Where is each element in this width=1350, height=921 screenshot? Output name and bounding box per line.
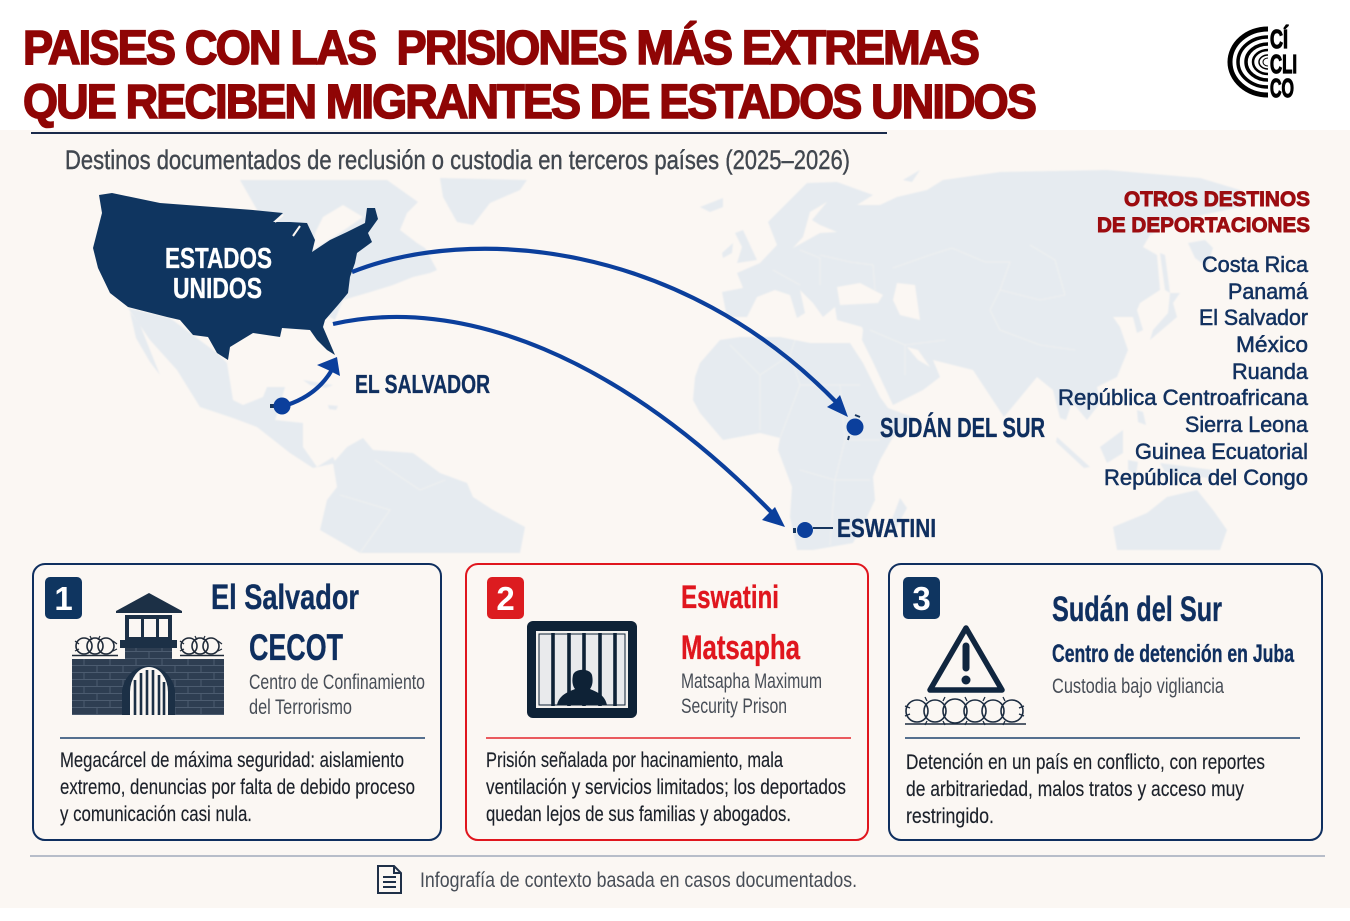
other destinations list: República del Congo	[1104, 465, 1308, 490]
marker: Eswatini	[793, 522, 833, 538]
description: Detención en un país en conflicto, con reportes	[906, 751, 1265, 774]
badge 2	[487, 577, 524, 619]
arrow: to El Salvador	[287, 357, 340, 405]
subheading: Matsapha: Matsapha	[681, 629, 801, 667]
marker: El Salvador	[270, 398, 290, 414]
facility name: Security Prison	[681, 695, 787, 718]
other destinations list: Ruanda	[1232, 359, 1309, 384]
country borders	[340, 245, 1075, 553]
icon: prisoner behind bars	[527, 621, 637, 718]
other destinations heading	[1097, 188, 1310, 237]
label: Sudán del Sur: SUDÁN DEL SUR	[880, 412, 1045, 443]
icon: prison fortress	[72, 593, 224, 715]
other destinations list: República Centroafricana	[1058, 385, 1309, 410]
other destinations list	[1058, 252, 1309, 490]
description: Megacárcel de máxima seguridad: aislamiento	[60, 749, 404, 772]
description: quedan lejos de sus familias y abogados.	[486, 803, 791, 826]
badge 3: 3	[912, 580, 931, 617]
icon: document	[378, 866, 401, 893]
subtitle: Destinos documentados de reclusión o custodia en terceros países (2025–2026)	[65, 145, 850, 175]
map: Estados Unidos highlighted	[93, 193, 378, 360]
icon: warning and barbed wire	[905, 628, 1026, 725]
description	[486, 749, 846, 826]
heading: El Salvador: El Salvador	[211, 578, 359, 617]
facility name: Centro de Confinamiento	[249, 671, 425, 694]
description: y comunicación casi nula.	[60, 803, 252, 826]
title rule	[31, 132, 887, 134]
badge 3	[903, 577, 940, 619]
logo: Cíclico: CO	[1270, 73, 1294, 103]
panel: Sudán del Sur	[889, 564, 1322, 840]
logo: Cíclico	[1230, 24, 1297, 103]
other destinations list: Costa Rica	[1202, 252, 1309, 277]
description: de arbitrariedad, malos tratos y acceso muy	[906, 778, 1244, 801]
footer note: Infografía de contexto basada en casos documentados.	[420, 869, 857, 892]
description: extremo, denuncias por falta de debido proceso	[60, 776, 415, 799]
badge 1	[45, 577, 82, 619]
custody note: Custodia bajo vigliancia	[1052, 675, 1224, 698]
description: restringido.	[906, 805, 994, 828]
title	[23, 21, 1036, 129]
other destinations list: Guinea Ecuatorial	[1135, 439, 1308, 464]
label: Eswatini: ESWATINI	[837, 513, 936, 543]
heading: Sudán del Sur: Sudán del Sur	[1052, 590, 1222, 629]
description: ventilación y servicios limitados; los deportados	[486, 776, 846, 799]
arrow: Estados Unidos to Sudán del Sur	[352, 249, 848, 417]
title: PAISES CON LAS PRISIONES MÁS EXTREMAS	[23, 21, 979, 75]
facility name	[249, 671, 425, 719]
other destinations heading: DE DEPORTACIONES	[1097, 214, 1310, 237]
label: Estados Unidos: ESTADOS	[165, 243, 272, 275]
label: Estados Unidos	[165, 243, 272, 305]
seas cut out of the land	[313, 202, 930, 367]
facility name: Matsapha Maximum	[681, 670, 822, 693]
other destinations list: Panamá	[1228, 279, 1309, 304]
other destinations list: México	[1236, 332, 1308, 357]
other destinations list: Sierra Leona	[1185, 412, 1309, 437]
badge 1: 1	[54, 580, 73, 617]
label: El Salvador: EL SALVADOR	[355, 369, 490, 399]
panel: El Salvador CECOT	[33, 564, 441, 840]
badge 2: 2	[496, 580, 515, 617]
logo: Cíclico: CÍ	[1270, 24, 1289, 54]
label: Estados Unidos: UNIDOS	[173, 273, 262, 305]
other destinations list: El Salvador	[1199, 305, 1308, 330]
arrow: Estados Unidos to Eswatini	[333, 317, 785, 527]
other destinations heading: OTROS DESTINOS	[1124, 188, 1310, 211]
world map background	[128, 170, 1248, 553]
description	[60, 749, 415, 826]
panel: Eswatini Matsapha	[466, 564, 868, 840]
subheading: CECOT: CECOT	[249, 627, 343, 668]
logo: Cíclico: CLI	[1270, 49, 1297, 79]
description	[906, 751, 1265, 828]
title: QUE RECIBEN MIGRANTES DE ESTADOS UNIDOS	[23, 76, 1036, 129]
heading: Eswatini: Eswatini	[681, 579, 779, 615]
facility name	[681, 670, 822, 718]
description: Prisión señalada por hacinamiento, mala	[486, 749, 783, 772]
marker: Sudán del Sur	[846, 415, 864, 440]
facility name: del Terrorismo	[249, 696, 352, 719]
